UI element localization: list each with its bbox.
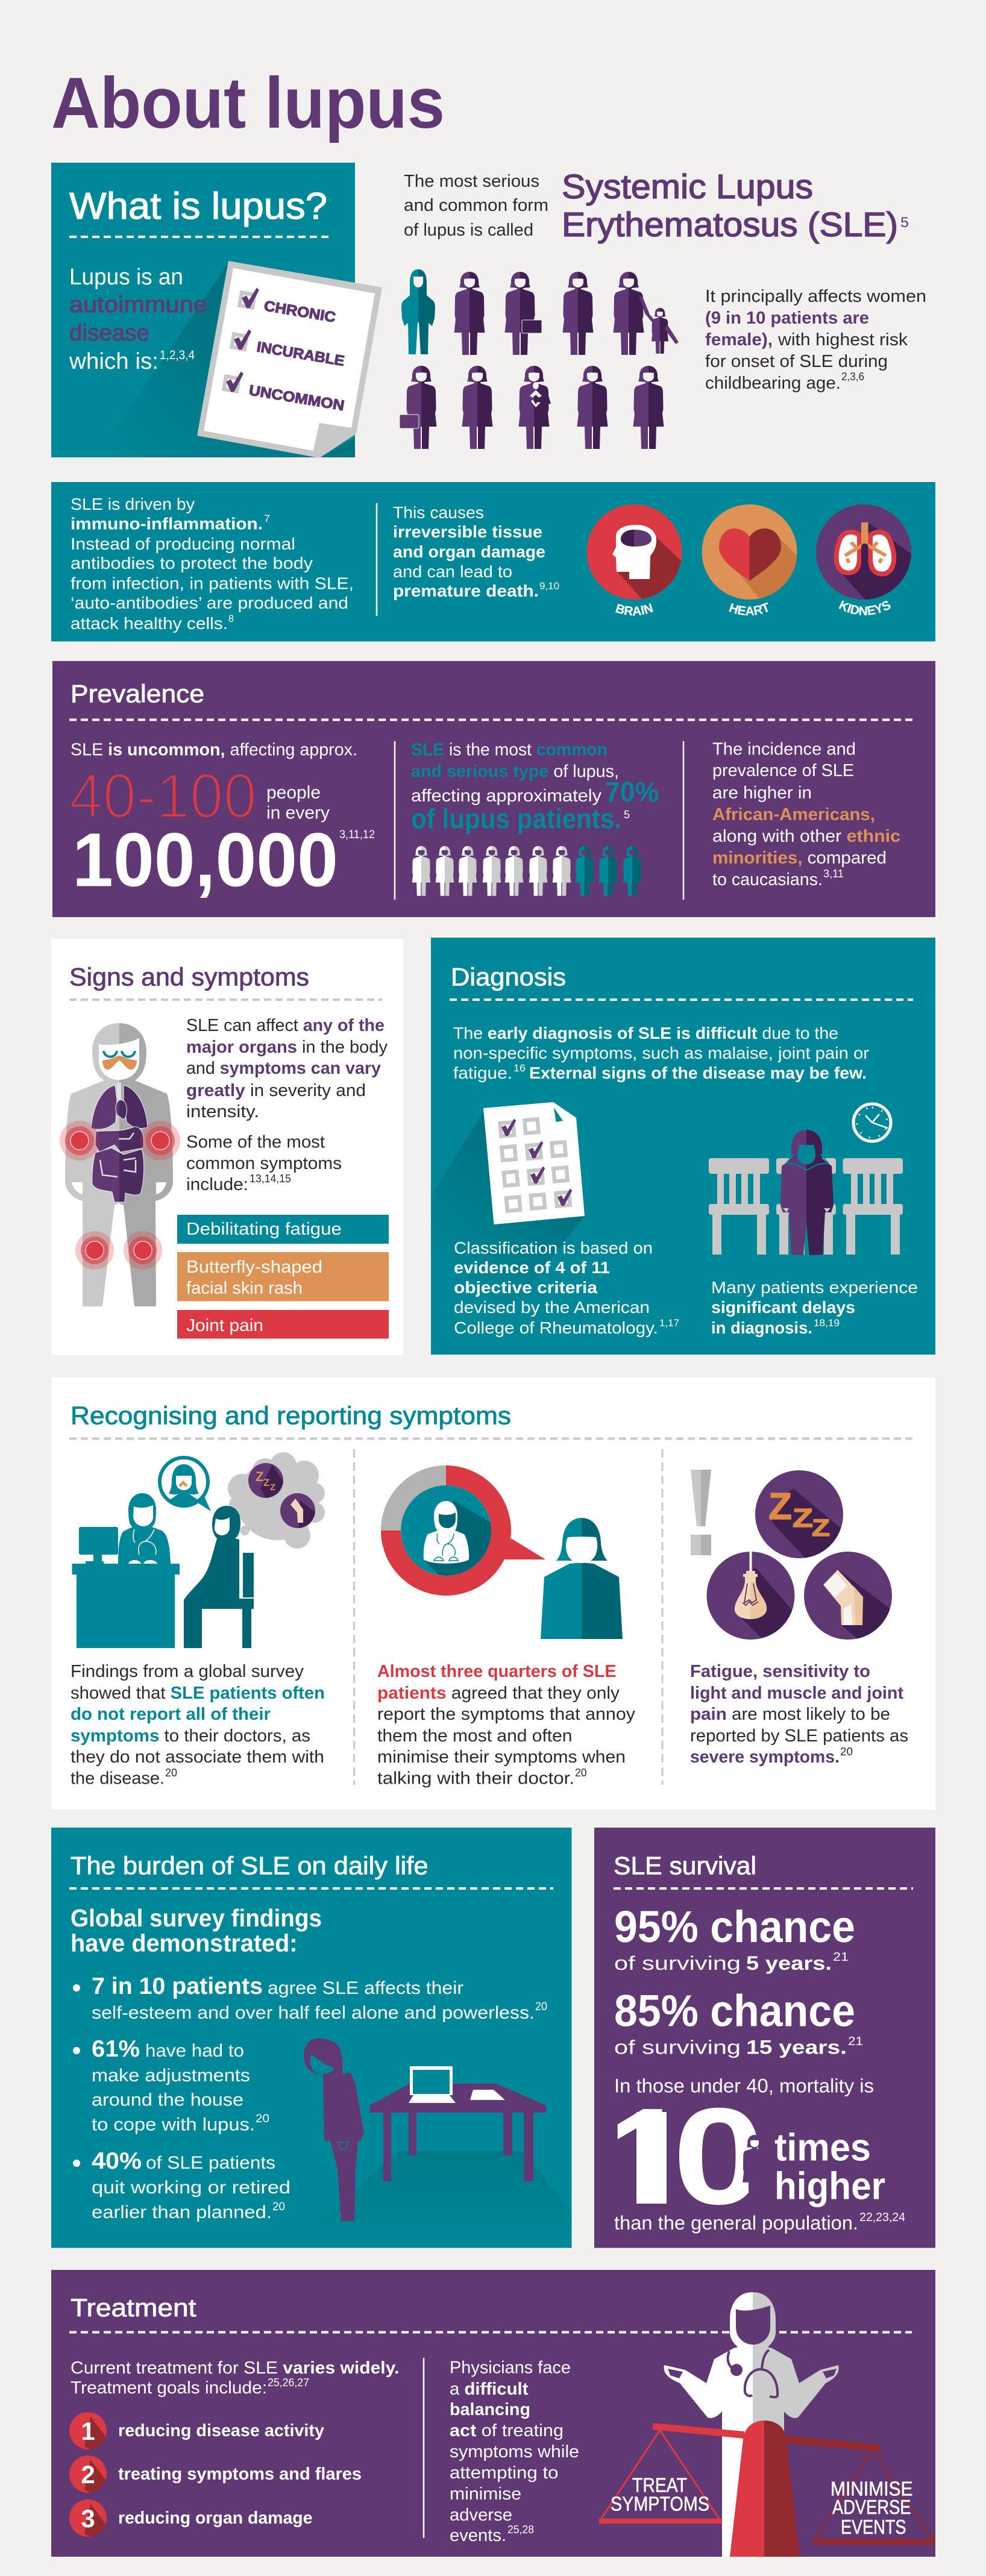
text: column 2: them the most and often [377,1726,573,1746]
text: symptoms description: Some of the most [186,1133,325,1152]
text: column 3: severe symptoms. [690,1747,840,1767]
text: column 2: minimise their symptoms when [377,1747,626,1767]
text: diagnosis difficulty: non-specific symptoms, such as malaise, joint pain or [453,1044,869,1062]
illustration: doctor consultation [72,1452,325,1648]
text: delays in diagnosis: 18,19 [814,1317,840,1329]
text: balancing act: attempting to [450,2463,558,2483]
heading: what is lupus: What is lupus? [69,186,327,227]
text: tissue damage: 9,10 [539,580,559,592]
bullet: 61%: 61% [92,2036,140,2062]
text: principally affects women [705,287,926,393]
icon group: ten women [400,269,679,449]
panel: immuno-inflammation [51,482,935,641]
bullet: 7 in 10: 20 [535,2001,547,2013]
icon: fatigue zzz: Z [768,1486,792,1528]
speech bubble: doctor view of patient [160,1458,211,1511]
text: treatment varies: 25,26,27 [268,2377,309,2389]
chart: 7 in 10 figures [412,846,641,896]
stat: 70% of lupus patients: of lupus patients. [411,803,621,834]
goal 1 [69,2412,324,2452]
text: balancing act: 25,28 [507,2524,534,2536]
text: principally affects women: (9 in 10 patients are [705,309,869,328]
text: treatment varies [71,2358,399,2398]
thought cloud: Z [270,1482,275,1493]
text: tissue damage: and can lead to [393,562,512,581]
text: principally affects women: It principally affects women [705,287,926,306]
stat: 85% chance: 15 years. [746,2037,847,2058]
bullet: 40%: of SLE patients [146,2153,275,2173]
stat: 95% chance: 5 years. [746,1952,832,1974]
stat: 95% chance: 21 [833,1951,849,1964]
text: column 3 [690,1662,908,1767]
stat: ten times higher mortality: 22,23,24 [859,2211,905,2224]
bullet: 61%: around the house [92,2090,243,2110]
text: what drives sle: attack healthy cells. [71,614,228,633]
stat: 40-100 in every 100,000 [69,740,375,903]
text: symptoms description: SLE can affect any of the [186,1016,385,1035]
panel: what is lupus [51,163,382,458]
heading: prevalence: Prevalence [71,680,204,707]
bullet: 40%: 40% [92,2148,142,2174]
heading: signs and symptoms: Signs and symptoms [69,963,309,991]
text: tissue damage: irreversible tissue [393,522,542,541]
text: ethnic differences: 3,11 [823,868,844,880]
text: treatment varies: Treatment goals include: [71,2378,267,2398]
thought cloud [228,1452,325,1549]
intro text: 1,2,3,4 [160,348,195,362]
intro text: Lupus is an [69,265,183,290]
symptom: butterfly rash: Butterfly-shaped [186,1258,322,1277]
bullet: 40%: 20 [272,2201,285,2213]
bullet: 40% [73,2148,290,2222]
text: what drives sle: antibodies to protect the body [71,554,313,572]
text: diagnosis difficulty: External signs of the disease may be few. [529,1064,867,1082]
bullet: 61%: have had to [145,2041,244,2061]
laptop and paper [409,2066,505,2103]
panel: sle survival [594,1828,935,2248]
text: ethnic differences: to caucasians. [712,870,823,889]
heading: systemic lupus erythematosus [562,168,909,244]
panel: signs and symptoms [51,939,403,1355]
text: tissue damage: premature death. [393,581,539,600]
text: diagnosis difficulty [453,1024,869,1082]
scale pan: minimise adverse events: ADVERSE [832,2496,911,2518]
symptom: joint pain: Joint pain [186,1316,263,1335]
joint: right elbow [140,1121,180,1161]
heading: systemic lupus erythematosus: 5 [900,215,909,231]
text: symptoms description: 13,14,15 [250,1173,291,1185]
text: column 2 [377,1662,636,1788]
text: classification criteria: devised by the American [454,1298,650,1317]
text: principally affects women: childbearing age. [705,374,841,393]
text: balancing act: Physicians face [450,2358,571,2378]
text: treatment varies: Current treatment for SLE varies widely. [71,2358,399,2378]
text: what drives sle: ‘auto-antibodies’ are produced and [71,594,348,612]
text: diagnosis difficulty: fatigue. [453,1064,512,1082]
text: balancing act: balancing [450,2400,530,2419]
intro text: which is: [69,349,159,374]
patient listening [541,1518,623,1639]
text: most serious form: The most serious [404,172,539,191]
text: what drives sle: 7 [264,513,270,524]
stat: 85% chance: of surviving [614,2037,741,2058]
text: ethnic differences: minorities, compared [712,848,887,868]
icon: kidneys: KIDNEYS [839,600,891,616]
stat: 40-100 in every 100,000: in every [266,803,330,823]
goal 1: reducing disease activity [118,2421,324,2440]
icon: body with organs and joints [60,1023,180,1306]
text: ethnic differences [712,740,900,889]
text: balancing act: minimise [450,2484,521,2504]
text: column 2: patients agreed that they only [377,1684,620,1703]
text: what drives sle: Instead of producing normal [71,534,295,553]
text: balancing act: symptoms while [450,2442,579,2462]
stat: 70% of lupus patients [411,740,659,834]
text: principally affects women: 2,3,6 [841,371,864,383]
symptom: debilitating fatigue: Debilitating fatigue [186,1220,342,1239]
goal 3: 3 [81,2504,95,2533]
text: column 3: light and muscle and joint [690,1684,903,1703]
text: classification criteria: Classification is based on [454,1239,653,1257]
icon: fatigue zzz: Z [793,1503,813,1533]
text: delays in diagnosis: Many patients experience [711,1278,918,1297]
organs [91,1085,148,1202]
joint: right knee [124,1231,162,1270]
stat: 40-100 in every 100,000: people [266,783,321,803]
goal 2 [69,2455,362,2496]
text: delays in diagnosis: significant delays [711,1298,855,1317]
paper shadow [431,1112,585,1291]
bullet: 40%: earlier than planned. [92,2202,272,2222]
icon: fatigue zzz [755,1470,844,1561]
bullet: 61%: to cope with lupus. [92,2115,255,2134]
stat: 40-100 in every 100,000: 100,000 [72,817,338,903]
text: symptoms description: major organs in the body [186,1038,388,1057]
intro text: autoimmune [69,292,207,318]
heading: burden: The burden of SLE on daily life [71,1851,428,1880]
text: most serious form [404,172,548,240]
bullet: 7 in 10: 7 in 10 patients [92,1973,263,1999]
text: classification criteria: College of Rheumatology. [454,1318,658,1337]
text: balancing act [450,2358,579,2545]
thought cloud: Z [256,1469,263,1484]
text: most serious form: of lupus is called [404,221,533,240]
text: diagnosis difficulty: The early diagnosis of SLE is difficult due to the [453,1024,838,1042]
icon: painful knee [804,1552,892,1640]
intro text: disease [69,321,149,346]
illustration: almost three quarters chart [381,1465,623,1639]
text: column 2: Almost three quarters of SLE [377,1662,616,1681]
text: principally affects women: for onset of SLE during [705,352,888,371]
icon: kidneys [816,504,911,616]
icon: checklist paper: CHRONIC [263,298,337,326]
goal 3 [69,2499,312,2540]
text: column 1: 20 [165,1767,177,1779]
text: most serious form: and common form [404,196,548,215]
icon: waiting patient [780,1130,834,1255]
text: column 2: talking with their doctor. [377,1769,574,1788]
stat: ten times higher mortality: 0 [673,2080,765,2233]
scale pan: treat symptoms: SYMPTOMS [611,2492,709,2515]
text: column 1: the disease. [71,1769,165,1788]
text: column 3: Fatigue, sensitivity to [690,1662,870,1681]
paper shadow [134,264,355,457]
stat: 70% of lupus patients: SLE is the most common [411,740,608,759]
doctor [118,1493,171,1564]
stat: ten times higher mortality: times [774,2126,871,2169]
doctor figure [664,2292,839,2557]
heading: systemic lupus erythematosus: Erythematosus (SLE) [562,205,898,244]
text: balancing act: act of treating [450,2421,564,2440]
text: what drives sle: 8 [228,613,234,624]
stat: ten times higher mortality: 1 [608,2080,689,2233]
heading: treatment: Treatment [71,2293,196,2322]
stat: ten times higher mortality: In those under 40, mortality is [614,2075,874,2097]
text: delays in diagnosis: in diagnosis. [711,1318,812,1337]
desk and monitor [72,1527,180,1648]
panel: prevalence [52,661,935,917]
goal 1: 1 [81,2417,95,2445]
bullet: 61%: make adjustments [92,2066,250,2086]
icon: heart: HEART [729,603,768,616]
text: column 2: 20 [575,1767,587,1779]
text: diagnosis difficulty: 16 [513,1062,526,1074]
text: what drives sle: from infection, in patients with SLE, [71,574,354,593]
text: column 1: symptoms to their doctors, as [71,1726,310,1746]
icon: criteria checklist [483,1102,585,1224]
text: balancing act: events. [450,2526,506,2545]
text: principally affects women: female), [705,330,773,349]
stat: ten times higher mortality: than the general population. [614,2212,858,2234]
person [304,2039,364,2221]
chart: three-quarter ring with doctor [381,1465,545,1586]
face: eyes and butterfly rash [102,1051,137,1070]
symptom: butterfly rash [177,1252,389,1302]
text: balancing act: adverse [450,2505,512,2525]
text: principally affects women: with highest risk [777,330,908,349]
stat: 95% chance: of surviving [614,1952,741,1974]
panel: recognising and reporting symptoms [51,1377,935,1810]
text: ethnic differences: along with other ethnic [712,827,900,846]
text: column 1: showed that SLE patients often [71,1684,325,1703]
joint: left knee [75,1231,114,1270]
text: what drives sle: SLE is driven by [71,495,195,513]
text: symptoms description: and symptoms can vary [186,1059,381,1078]
joint: left elbow [60,1121,99,1161]
text: ethnic differences: African-Americans, [712,805,875,824]
bullet: 7 in 10: agree SLE affects their [268,1978,463,1998]
text: column 1 [71,1662,325,1788]
text: ethnic differences: are higher in [712,783,812,803]
icon: checklist paper: INCURABLE [256,339,345,369]
text: ethnic differences: prevalence of SLE [712,761,854,780]
exclamation mark [691,1470,711,1555]
text: classification criteria [454,1239,679,1337]
intro text [69,265,207,374]
text: what drives sle: immuno-inflammation. [71,515,263,533]
scale beam and post [653,2421,881,2557]
subheading: survey findings [71,1904,322,1957]
symptom: debilitating fatigue [177,1215,389,1244]
heading: survival: SLE survival [614,1851,756,1880]
stat: 85% chance: 85% chance [614,1986,855,2035]
stat: 40-100 in every 100,000: 3,11,12 [339,829,375,841]
panel: diagnosis [431,938,935,1355]
icon: waiting chairs [709,1158,903,1255]
goal 3: reducing organ damage [118,2509,312,2528]
desk [370,2084,546,2181]
text: column 1: they do not associate them with [71,1747,324,1767]
panel: burden of sle [51,1828,571,2248]
illustration: doctor balancing scale [599,2292,935,2557]
text: ethnic differences: The incidence and [712,740,856,759]
icon: light bulb [706,1552,794,1640]
illustration: stooped person at desk [304,2039,546,2221]
heading: recognising and reporting: Recognising and reporting symptoms [71,1402,511,1429]
bullet: 7 in 10: self-esteem and over half feel alone and powerless. [92,2003,535,2023]
stat: 70% of lupus patients: affecting approximately [411,786,602,806]
stat: 85% chance: 21 [848,2035,863,2048]
text: tissue damage [393,503,559,600]
text: symptoms description: greatly in severity and [186,1081,366,1100]
heading: systemic lupus erythematosus: Systemic Lupus [562,168,813,206]
stat: 95% chance [614,1902,855,1974]
stat: 70% of lupus patients: 5 [624,809,630,821]
heading: diagnosis: Diagnosis [451,963,566,991]
text: symptoms description: include: [186,1175,248,1194]
scale pan: minimise adverse events: MINIMISE [831,2478,912,2499]
text: column 1: do not report all of their [71,1705,271,1724]
text: tissue damage: This causes [393,503,484,522]
text: column 3: pain are most likely to be [690,1705,890,1724]
thought cloud: Z [263,1477,269,1488]
text: delays in diagnosis [711,1278,918,1337]
bullet: 40%: quit working or retired [92,2178,290,2198]
text: symptoms description: intensity. [186,1102,259,1121]
icon: checklist paper [197,261,382,458]
text: what drives sle [71,495,354,633]
bullet: 7 in 10 [73,1973,547,2023]
stat: 70% of lupus patients: 70% [605,776,659,807]
illustration: severe symptoms icons [691,1470,898,1645]
scale pan: treat symptoms [599,2430,722,2524]
title: About lupus [51,63,445,143]
text: classification criteria: 1,17 [659,1317,679,1329]
floor shadow [355,2151,563,2202]
text: classification criteria: objective criteria [454,1278,597,1297]
bullet: 61%: 20 [256,2113,269,2125]
stat: 40-100 in every 100,000: 40-100 [69,761,257,832]
panel: treatment [51,2270,935,2557]
icon: heart [702,504,797,616]
icon: child [639,295,679,354]
stat: 95% chance: 95% chance [614,1902,855,1952]
stat: ten times higher mortality [603,2075,905,2234]
subheading: survey findings: have demonstrated: [71,1929,298,1957]
text: balancing act: a difficult [450,2380,529,2399]
icon: clock [853,1104,891,1141]
text: symptoms description [186,1016,388,1194]
subheading: survey findings: Global survey findings [71,1904,322,1932]
doctor in ring [424,1501,469,1564]
icon: teal patient [401,269,435,354]
bullet: 61% [73,2036,269,2134]
text: column 3: 20 [840,1746,853,1758]
patient seated [184,1506,254,1648]
icon: fatigue zzz: Z [812,1515,830,1541]
icon: baby [530,382,551,407]
text: symptoms description: common symptoms [186,1154,342,1173]
scale pan: minimise adverse events: EVENTS [841,2516,906,2538]
stat: 85% chance [614,1986,863,2058]
scale pan: minimise adverse events [812,2451,935,2545]
goal 2: treating symptoms and flares [118,2465,362,2484]
icon: brain [587,504,682,616]
symptom: butterfly rash: facial skin rash [186,1279,303,1298]
stat: 40-100 in every 100,000: SLE is uncommon, affecting approx. [71,740,357,759]
stat: ten times higher mortality: higher [774,2164,885,2208]
scale pan: treat symptoms: TREAT [632,2474,687,2496]
icon: checklist paper: UNCOMMON [248,382,345,414]
text: column 3: reported by SLE patients as [690,1726,908,1746]
text: classification criteria: evidence of 4 of 11 [454,1258,610,1277]
text: column 2: report the symptoms that annoy [377,1705,636,1724]
text: tissue damage: and organ damage [393,542,545,561]
symptom: joint pain [177,1310,389,1339]
stat: 70% of lupus patients: and serious type of lupus, [411,762,619,781]
icon: brain: BRAIN [615,603,653,616]
goal 2: 2 [81,2460,95,2489]
text: column 1: Findings from a global survey [71,1662,304,1681]
